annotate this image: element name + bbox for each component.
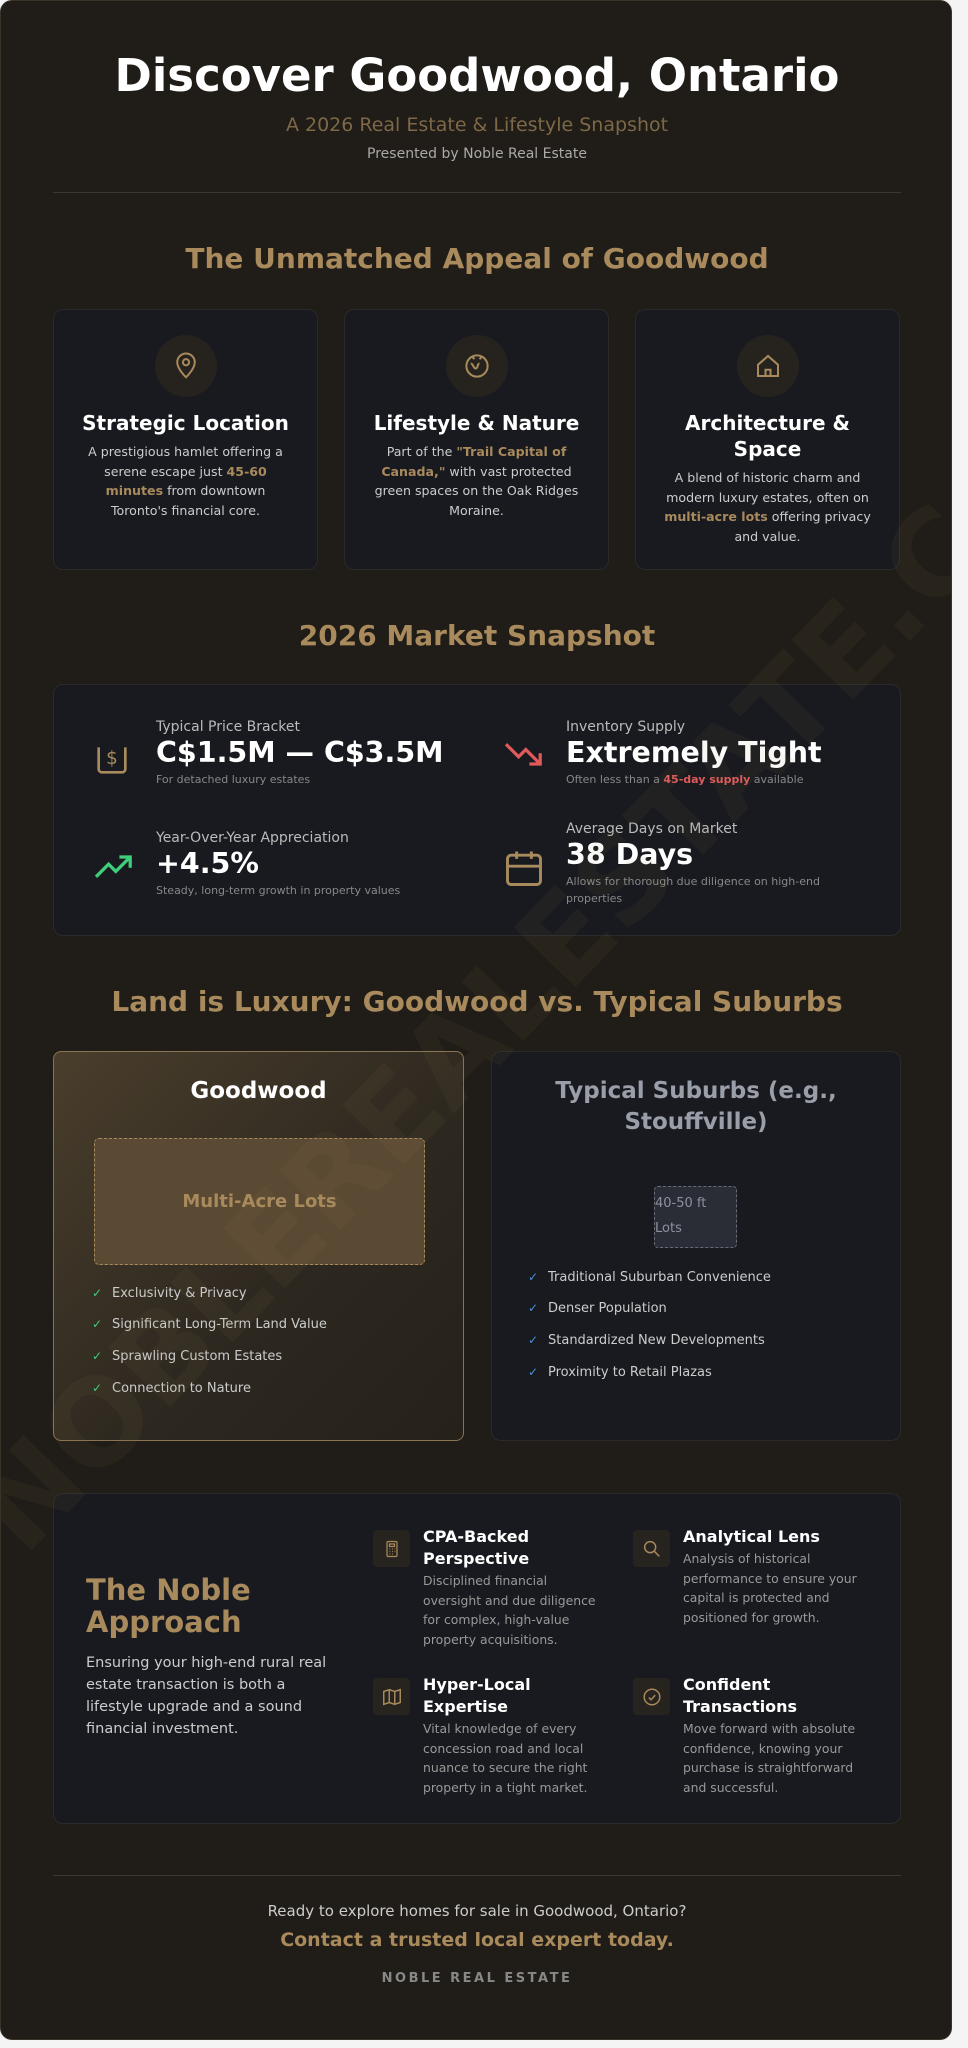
icon: calculator [373,1530,410,1567]
icon: calendar [506,852,542,886]
list: suburb traits: ✓ [528,1365,538,1379]
panel: typical suburbs [491,1051,901,1441]
card: architecture: A blend of historic charm and modern luxury estates, often on multi-acre lots offering privacy and value. [664,470,871,544]
text: noble intro: Ensuring your high-end rural real estate transaction is both a lifestyle upgrade and a sound financial investment. [86,1655,326,1737]
card: strategic location: A prestigious hamlet offering a serene escape just 45-60 minutes from downtown Toronto's financial core. [88,444,283,518]
feature: analytical: Analytical Lens [683,1527,820,1546]
panel: goodwood: Goodwood [190,1078,327,1104]
subtitle: A 2026 Real Estate & Lifestyle Snapshot [286,114,668,136]
cta text: Ready to explore homes for sale in Goodwood, Ontario? [268,1902,686,1920]
card: strategic location: Strategic Location [82,411,289,435]
list: goodwood benefits: Sprawling Custom Estates [112,1349,282,1364]
icon: trend down [504,743,542,766]
lot box: small [654,1186,737,1248]
icon: magnifier [633,1530,670,1567]
stat: price: Typical Price Bracket [156,719,300,735]
heading: market snapshot: 2026 Market Snapshot [299,619,655,652]
icon: globe [446,335,508,397]
cta highlight: Contact a trusted local expert today. [280,1929,674,1951]
list: suburb traits: Traditional Suburban Convenience [548,1270,771,1285]
lot box: small: 40-50 ft [655,1196,706,1211]
list: goodwood benefits: ✓ [92,1349,102,1363]
stat: days on market: 38 Days [566,838,693,871]
list: suburb traits: Denser Population [548,1301,667,1316]
card: lifestyle: Part of the "Trail Capital of Canada," with vast protected green spaces on the Oak Ridges Moraine. [375,444,578,518]
icon: location pin [154,335,216,397]
presented by: Presented by Noble Real Estate [367,146,587,162]
list: goodwood benefits: Connection to Nature [112,1381,251,1396]
feature: analytical: Analysis of historical performance to ensure your capital is protected and positioned for growth. [683,1551,857,1624]
icon: trend up [94,855,132,878]
list: suburb traits: ✓ [528,1301,538,1315]
icon: money bag [97,747,127,774]
heading: appeal: The Unmatched Appeal of Goodwood [185,242,769,275]
list: suburb traits [528,1270,771,1380]
stat: inventory: Inventory Supply [566,719,685,735]
card: architecture: Architecture & [685,411,850,435]
feature: confident [633,1675,855,1794]
footer brand: NOBLE REAL ESTATE [382,1971,572,1986]
stat: inventory: Often less than a 45-day supply available [566,773,803,786]
icon: check circle [633,1678,670,1715]
stat: inventory: Extremely Tight [566,736,822,769]
stat: appreciation: Year-Over-Year Appreciation [156,830,349,846]
feature: analytical [633,1527,857,1624]
icon: money bag: $ [106,748,118,769]
stat: price: For detached luxury estates [156,773,310,786]
icon: map [373,1678,410,1715]
feature: confident: Move forward with absolute confidence, knowing your purchase is straightforward and successful. [683,1721,855,1794]
list: goodwood benefits: ✓ [92,1286,102,1300]
heading: noble approach: The Noble [86,1573,251,1607]
heading: land is luxury: Land is Luxury: Goodwood vs. Typical Suburbs [111,985,843,1018]
list: suburb traits: ✓ [528,1270,538,1284]
list: goodwood benefits: Exclusivity & Privacy [112,1286,247,1301]
card: architecture: Space [734,437,801,461]
card: lifestyle: Lifestyle & Nature [374,411,579,435]
panel: goodwood [53,1051,464,1441]
feature: hyper-local: Vital knowledge of every concession road and local nuance to secure the right property in a tight market. [423,1721,587,1794]
panel: market stats [53,684,901,936]
lot box: multi-acre [94,1138,425,1265]
lot box: multi-acre: Multi-Acre Lots [182,1191,337,1212]
list: goodwood benefits: Significant Long-Term Land Value [112,1317,327,1332]
list: suburb traits: ✓ [528,1333,538,1347]
panel: typical suburbs: Stouffville) [624,1109,768,1135]
heading: noble approach [86,1573,251,1639]
feature: hyper-local: Hyper-Local Expertise [423,1675,531,1716]
title: Discover Goodwood, Ontario [115,49,839,102]
list: suburb traits: Proximity to Retail Plazas [548,1365,712,1380]
panel: noble approach [53,1493,901,1824]
feature: confident: Confident Transactions [683,1675,797,1716]
stat: appreciation [94,830,400,897]
stat: days on market [506,821,820,905]
stat: appreciation: Steady, long-term growth in property values [156,884,400,897]
stat: appreciation: +4.5% [156,847,259,880]
stat: days on market: Average Days on Market [566,821,737,837]
list: goodwood benefits: ✓ [92,1381,102,1395]
feature: CPA: Disciplined financial oversight and due diligence for complex, high-value property acquisitions. [423,1573,596,1646]
card: architecture [635,309,900,570]
stat: days on market: Allows for thorough due diligence on high-end properties [566,875,820,905]
stat: inventory [504,719,822,786]
feature: CPA: CPA-Backed Perspective [423,1527,529,1568]
feature: hyper-local [373,1675,588,1794]
card: lifestyle [344,309,609,570]
feature: CPA [373,1527,596,1646]
list: goodwood benefits: ✓ [92,1317,102,1331]
lot box: small: Lots [655,1221,682,1236]
stat: price [97,719,444,786]
icon: house [736,335,798,397]
list: goodwood benefits [92,1286,327,1396]
card: strategic location [53,309,318,570]
heading: noble approach: Approach [86,1605,242,1639]
panel: typical suburbs: Typical Suburbs (e.g., [555,1078,837,1104]
stat: price: C$1.5M — C$3.5M [156,736,444,769]
list: suburb traits: Standardized New Developments [548,1333,765,1348]
